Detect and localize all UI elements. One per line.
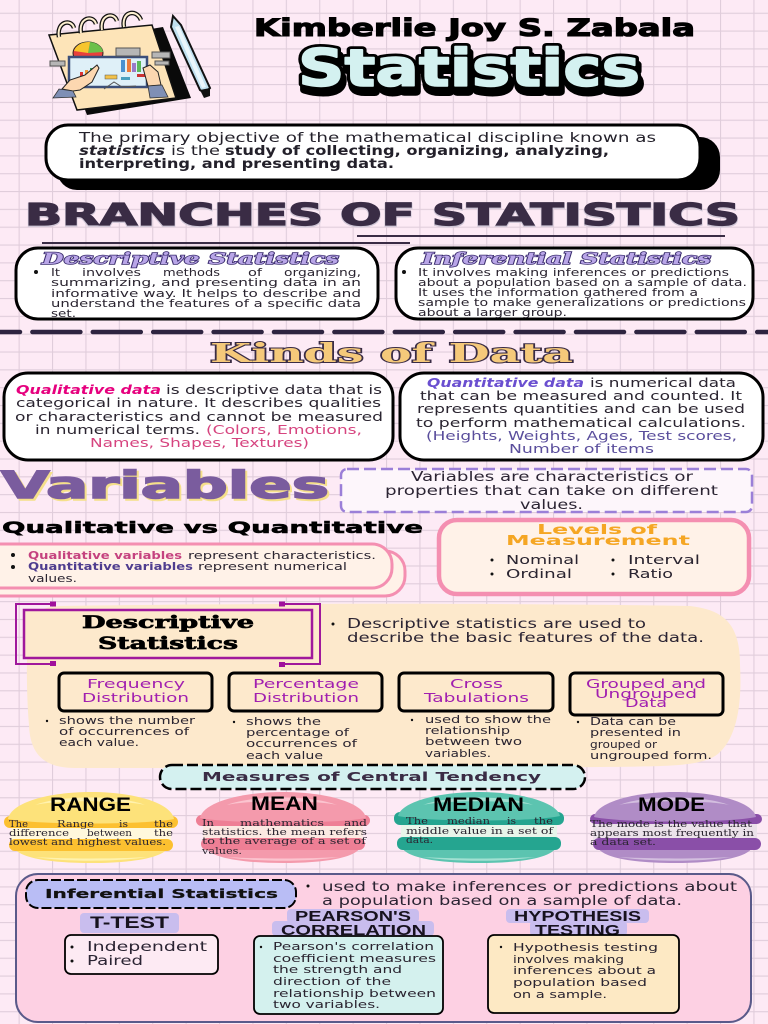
label: Pearson's correlation: PEARSON'S: [295, 908, 411, 925]
text: percentage description: each value: [246, 750, 323, 762]
panel: quantitative data: represents quantities and can be used: [417, 402, 745, 417]
text: grouped data description: Data can be: [590, 716, 676, 728]
box: hypothesis testing description: Hypothesis testing: [513, 942, 658, 954]
callout: variables definition: Variables are characteristics or: [411, 470, 694, 485]
text: grouped data description: [577, 716, 712, 762]
panel: definition of statistics: study of collecting, organizing, analyzing,: [225, 144, 609, 159]
macaron: mean: mathematics: [240, 819, 325, 829]
panel: descriptive statistics branch: informative way. It helps to describe and: [51, 287, 361, 300]
heading: Kinds of Data: Kinds of Data: [210, 339, 573, 369]
macaron: mean: statistics. the mean refers: [202, 828, 368, 838]
label: hypothesis testing: TESTING: [535, 922, 620, 939]
macaron: mode: The mode is the value that: [590, 820, 752, 830]
panel: qualitative data: [4, 373, 393, 460]
text: percentage description: [233, 716, 357, 762]
heading: Variables: Variables: [3, 466, 331, 509]
panel: quantitative data: (Heights, Weights, Ages, Test scores,: [426, 429, 737, 444]
box: hypothesis testing description: [488, 935, 679, 1013]
heading: Branches of Statistics: BRANCHES OF STATISTICS: [25, 198, 740, 233]
text: cross tabulation description: between two: [425, 736, 522, 748]
box: T-test types: [65, 935, 218, 974]
text: grouped data description: grouped or: [590, 739, 658, 751]
text: frequency description: of occurrences of: [59, 726, 189, 738]
text: grouped data description: presented in: [590, 727, 681, 739]
panel: qualitative data: categorical in nature. It describes qualities: [16, 396, 381, 411]
author name: Kimberlie Joy S. Zabala: [254, 14, 695, 42]
title: Statistics: Statistics: [298, 39, 640, 99]
macaron: range: Range: [57, 820, 94, 830]
panel: descriptive statistics branch: Descriptive Statistics: [40, 249, 339, 268]
box: percentage distribution: Distribution: [253, 690, 359, 705]
label: Pearson's correlation: CORRELATION: [281, 922, 426, 939]
panel: qualitative data: Names, Shapes, Textures): [90, 436, 309, 451]
text: inferential statistics definition: used to make inferences or predictions about: [322, 880, 737, 895]
panel: inferential statistics branch: Inferential Statistics: [420, 249, 711, 268]
panel: qualitative data: (Colors, Emotions,: [206, 423, 362, 438]
pill: measures of central tendency: Measures of Central Tendency: [202, 769, 541, 784]
text: inferential statistics definition: a population based on a sample of data.: [322, 894, 682, 909]
macaron: median: [394, 792, 564, 863]
macaron: mean: In: [202, 819, 214, 829]
text: frequency description: each value.: [59, 737, 139, 749]
box: hypothesis testing description: on a sample.: [513, 989, 607, 1001]
panel: descriptive statistics branch: understand the features of a specific data: [51, 297, 361, 310]
pill: inferential statistics heading: Inferential Statistics: [45, 886, 278, 901]
macaron: range: difference: [9, 829, 69, 839]
box: cross tabulations: [399, 673, 553, 711]
box: grouped and ungrouped data: Ungrouped: [595, 686, 697, 701]
panel: levels of measurement: Interval: [628, 553, 700, 567]
text: inferential statistics definition: [306, 880, 737, 909]
label: T-test: T-TEST: [90, 913, 170, 932]
macaron: median: middle value in a set of: [406, 827, 554, 837]
callout: variables definition: values.: [520, 498, 583, 513]
box: Pearson's correlation description: the strength and: [273, 964, 402, 976]
panel: descriptive statistics branch: It: [51, 266, 61, 279]
macaron: mean: and: [344, 819, 367, 829]
panel: descriptive statistics branch: methods: [163, 266, 220, 279]
heading frame: Descriptive Statistics: [16, 602, 320, 667]
heading frame: Descriptive Statistics: Statistics: [98, 634, 238, 654]
box: grouped and ungrouped data: Grouped and: [586, 676, 706, 691]
label: T-test: [80, 913, 179, 933]
box: hypothesis testing description: involves making: [513, 954, 624, 966]
panel: qualitative data: Qualitative data: [16, 383, 161, 398]
text: frequency description: [46, 715, 196, 749]
panel: quantitative data: is numerical data: [590, 376, 736, 391]
box: Pearson's correlation description: direction of the: [273, 976, 391, 988]
panel: qualitative vs quantitative variables: Qualitative variables: [28, 550, 182, 562]
macaron: range: between: [87, 829, 132, 839]
macaron: mode: a data set.: [590, 838, 656, 848]
macaron: range: The: [9, 820, 28, 830]
text: percentage description: occurrences of: [246, 738, 357, 750]
panel: quantitative data: that can be measured and counted. It: [420, 389, 742, 404]
macaron: median: data.: [406, 836, 433, 846]
panel: descriptive statistics branch: of: [248, 266, 263, 279]
title: Statistics: Statistics: [300, 45, 642, 105]
panel: quantitative data: to perform mathematical calculations.: [416, 416, 746, 431]
macaron: median: MEDIAN: [433, 795, 524, 816]
box: Pearson's correlation description: coefficient measures: [273, 953, 436, 965]
box: frequency distribution: Distribution: [82, 690, 189, 705]
panel: levels of measurement: [439, 520, 749, 594]
macaron: mode: MODE: [638, 795, 705, 816]
macaron: range: RANGE: [50, 795, 131, 816]
panel: levels of measurement: Nominal: [506, 553, 579, 567]
macaron: mean: MEAN: [251, 794, 318, 815]
panel: definition of statistics: The primary objective of the mathematical discipline known as: [78, 131, 656, 146]
panel: descriptive statistics branch: involves: [82, 266, 141, 279]
box: percentage distribution: Percentage: [253, 676, 359, 691]
box: frequency distribution: Frequency: [87, 676, 186, 691]
macaron: median: The: [406, 817, 428, 827]
text: percentage description: percentage of: [246, 727, 349, 739]
panel: qualitative vs quantitative variables: [0, 544, 405, 596]
macaron: range: the: [154, 829, 173, 839]
panel: levels of measurement: Levels of: [537, 523, 658, 538]
box: Pearson's correlation description: [254, 936, 443, 1014]
panel: qualitative vs quantitative variables: represent numerical: [198, 561, 347, 573]
text: cross tabulation description: variables.: [425, 748, 491, 760]
panel: qualitative data: is descriptive data that is: [166, 383, 382, 398]
panel: qualitative vs quantitative variables: represent characteristics.: [188, 550, 376, 562]
panel: inferential statistics: [16, 874, 751, 1022]
panel: definition of statistics: [46, 125, 720, 190]
label: hypothesis testing: HYPOTHESIS: [514, 908, 641, 925]
heading: Branches of Statistics: BRANCHES OF STATISTICS: [25, 199, 740, 234]
label: hypothesis testing: [506, 908, 649, 939]
box: Pearson's correlation description: relationship between: [273, 988, 436, 1000]
pill: measures of central tendency: [160, 765, 585, 789]
text: descriptive statistics definition: [332, 617, 704, 646]
text: descriptive statistics definition: Descriptive statistics are used to: [347, 617, 646, 632]
macaron: median: is: [507, 817, 516, 827]
box: Pearson's correlation description: two variables.: [273, 999, 380, 1011]
panel: descriptive statistics branch: set.: [51, 307, 76, 320]
macaron: range: is: [119, 820, 128, 830]
text: grouped data description: ungrouped form.: [590, 750, 712, 762]
panel: levels of measurement: Measurement: [506, 534, 690, 549]
box: grouped and ungrouped data: Data: [625, 695, 667, 710]
heading: Qualitative vs Quantitative: Qualitative vs Quantitative: [2, 518, 423, 537]
pill: inferential statistics heading: [26, 880, 296, 908]
macaron: range: [4, 792, 178, 863]
macaron: range: lowest and highest values.: [9, 838, 166, 848]
text: descriptive statistics definition: describe the basic features of the data.: [347, 631, 704, 646]
panel: definition of statistics: is the: [171, 144, 220, 159]
panel: inferential statistics branch: [396, 248, 753, 319]
box: hypothesis testing description: population based: [513, 977, 647, 989]
box: Pearson's correlation description: Pearson's correlation: [273, 941, 434, 953]
icon: notebook with charts and pencil: [49, 13, 210, 115]
text: cross tabulation description: used to show the: [425, 714, 551, 726]
text: cross tabulation description: relationship: [425, 725, 510, 737]
text: percentage description: shows the: [246, 716, 321, 728]
heading: Variables: Variables: [1, 464, 329, 507]
panel: descriptive statistics branch: summarizing, and presenting data in an: [51, 276, 361, 289]
panel: quantitative data: [400, 373, 763, 460]
macaron: mean: [196, 792, 370, 863]
panel: levels of measurement: Ordinal: [506, 567, 572, 581]
panel: inferential statistics branch: It involves making inferences or predictions: [418, 266, 729, 279]
panel: definition of statistics: interpreting, and presenting data.: [79, 157, 394, 172]
box: percentage distribution: [229, 673, 382, 711]
panel: quantitative data: Quantitative data: [427, 376, 584, 391]
panel: definition of statistics: statistics: [79, 144, 165, 159]
box: cross tabulations: Cross: [450, 676, 503, 691]
label: Pearson's correlation: [272, 908, 434, 939]
macaron: mean: to the average of a set of: [202, 837, 367, 847]
box: T-test types: Paired: [87, 954, 143, 969]
text: frequency description: shows the number: [59, 715, 196, 727]
box: grouped and ungrouped data: [570, 673, 723, 715]
heading: Variables: [1, 464, 331, 509]
panel: inferential statistics branch: about a larger group.: [418, 306, 567, 319]
box: T-test types: Independent: [87, 940, 207, 955]
callout: variables definition: properties that can take on different: [385, 484, 718, 499]
panel: descriptive statistics branch: [16, 248, 378, 320]
heading frame: Descriptive Statistics: Descriptive: [82, 613, 254, 633]
text: cross tabulation description: [411, 714, 551, 760]
panel: quantitative data: Number of items: [509, 442, 654, 457]
macaron: mean: values.: [201, 847, 242, 857]
macaron: range: the: [154, 820, 173, 830]
macaron: mode: [590, 792, 762, 863]
panel: qualitative data: in numerical terms.: [35, 423, 200, 438]
panel: qualitative data: or characteristics and cannot be measured: [15, 410, 383, 425]
panel: levels of measurement: Ratio: [628, 567, 673, 581]
panel: inferential statistics branch: sample to make generalizations or predictions: [418, 296, 746, 309]
panel: qualitative vs quantitative variables: values.: [28, 573, 77, 585]
box: cross tabulations: Tabulations: [423, 690, 529, 705]
panel: qualitative vs quantitative variables: Quantitative variables: [28, 561, 193, 573]
heading: Branches of Statistics: [25, 198, 740, 234]
callout: variables definition: [341, 469, 752, 513]
macaron: median: median: [447, 817, 490, 827]
macaron: median: the: [534, 817, 553, 827]
macaron: mode: appears most frequently in: [590, 829, 754, 839]
box: frequency distribution: [59, 673, 212, 711]
title: Statistics: Statistics: [298, 39, 640, 99]
panel: descriptive statistics: [16, 602, 740, 769]
panel: descriptive statistics branch: organizing,: [284, 266, 361, 279]
panel: inferential statistics branch: It uses the information gathered from a: [418, 286, 698, 299]
box: hypothesis testing description: inferences about a: [513, 965, 656, 977]
panel: inferential statistics branch: about a population based on a sample of data.: [418, 276, 747, 289]
